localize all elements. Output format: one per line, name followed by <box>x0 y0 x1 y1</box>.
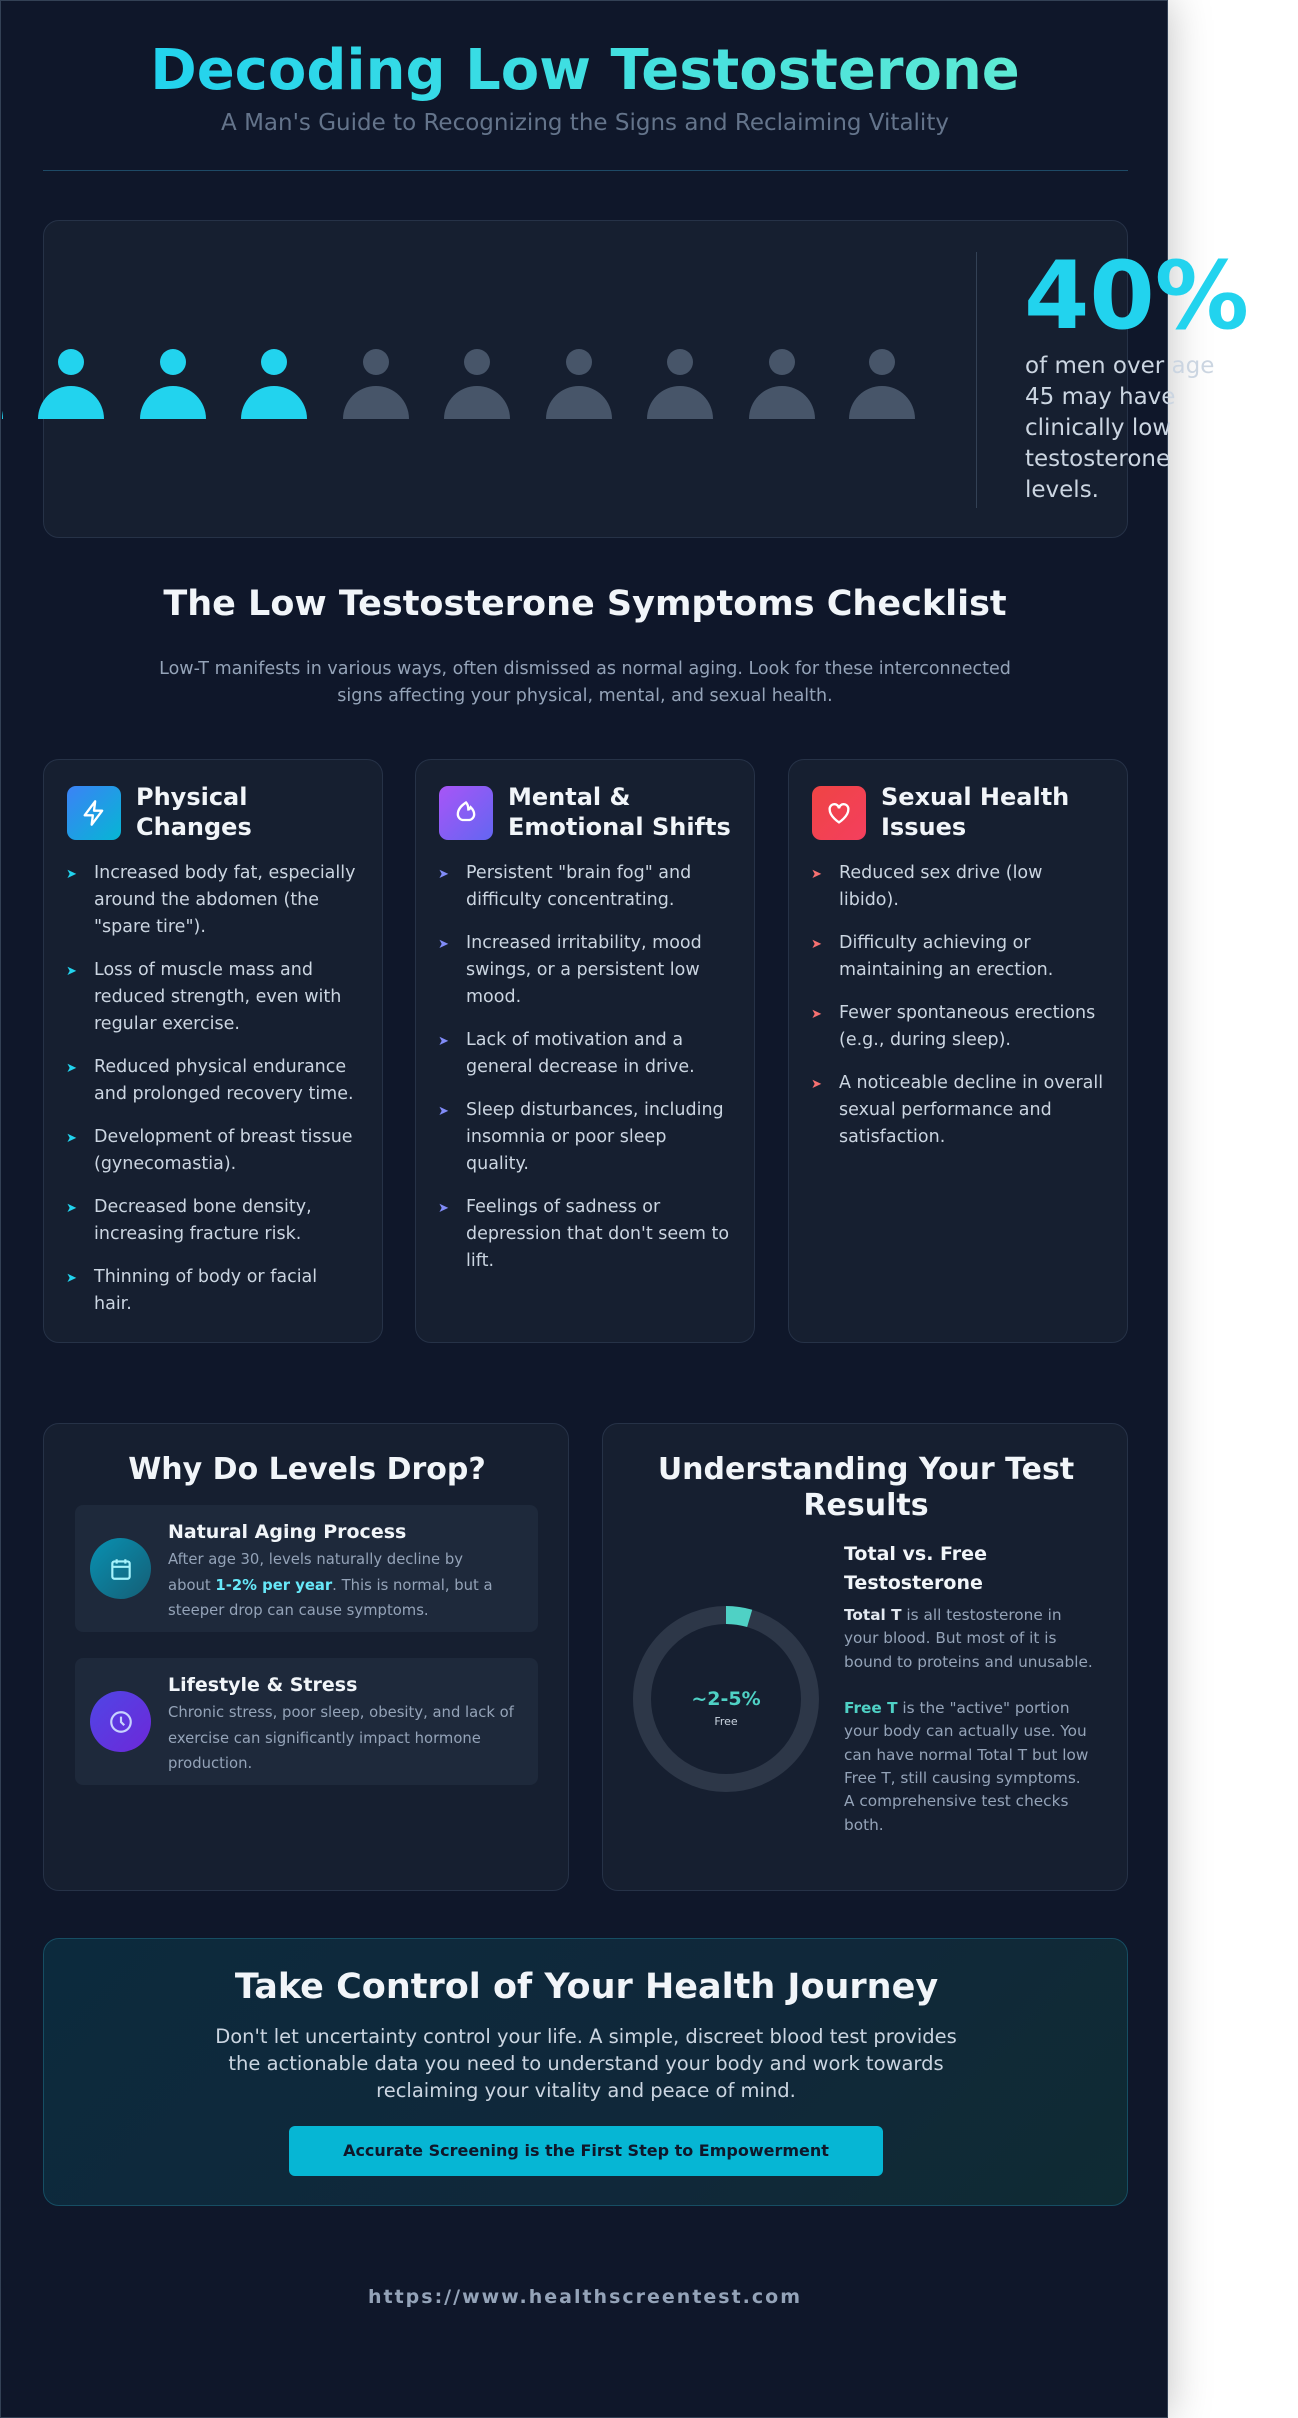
text: total vs free: Total vs. Free Testosterone <box>844 1543 987 1594</box>
panel: physical: Decreased bone density, increasing fracture risk. <box>94 1197 312 1244</box>
panel: physical: Loss of muscle mass and reduced strength, even with regular exercise. <box>94 960 341 1034</box>
panel: call to action <box>43 1938 1128 2206</box>
button <box>289 2126 883 2176</box>
panel: physical: Reduced physical endurance and prolonged recovery time. <box>94 1057 354 1104</box>
sub-card: lifestyle: Chronic stress, poor sleep, obesity, and lack of exercise can significantly impact hormone production. <box>168 1704 514 1772</box>
panel: physical: Changes <box>136 813 252 841</box>
panel: physical <box>43 759 383 1343</box>
donut chart <box>633 1606 819 1792</box>
intro text: Low-T manifests in various ways, often dismissed as normal aging. Look for these interconnected signs affecting your physical, mental, and sexual health. <box>159 659 1011 706</box>
donut chart: Free <box>714 1715 738 1728</box>
title: Decoding Low Testosterone <box>150 38 1020 103</box>
panel: sexual: A noticeable decline in overall sexual performance and satisfaction. <box>839 1073 1103 1147</box>
text: total vs free: Total T is all testosterone in your blood. But most of it is bound to proteins and unusable. <box>844 1606 1093 1671</box>
subtitle: A Man's Guide to Recognizing the Signs and Reclaiming Vitality <box>221 110 949 136</box>
heading: take control: Take Control of Your Health Journey <box>235 1967 938 2007</box>
sub-card: lifestyle <box>75 1658 538 1785</box>
icon: brain <box>439 786 493 840</box>
panel: mental: Persistent "brain fog" and difficulty concentrating. <box>466 863 691 910</box>
people icons <box>2 349 915 419</box>
panel: mental: Emotional Shifts <box>508 813 731 841</box>
panel: sexual: Fewer spontaneous erections (e.g., during sleep). <box>839 1003 1095 1050</box>
stat description: of men over age 45 may have clinically low testosterone levels. <box>1025 353 1214 503</box>
panel: mental: Sleep disturbances, including insomnia or poor sleep quality. <box>466 1100 724 1174</box>
icon: calendar <box>90 1538 151 1599</box>
panel: sexual: Sexual Health <box>881 783 1069 811</box>
panel: why levels drop <box>43 1423 569 1891</box>
panel: sexual <box>788 759 1128 1343</box>
panel: mental <box>415 759 755 1343</box>
sub-card: aging: Natural Aging Process <box>168 1521 406 1543</box>
heading: why: Why Do Levels Drop? <box>128 1452 486 1487</box>
sub-card: aging <box>75 1505 538 1632</box>
button: Accurate Screening is the First Step to Empowerment <box>343 2141 829 2160</box>
heading: checklist: The Low Testosterone Symptoms Checklist <box>163 584 1007 624</box>
icon: clock <box>90 1691 151 1752</box>
panel: mental: Mental & <box>508 783 630 811</box>
cta text: Don't let uncertainty control your life. A simple, discreet blood test provides the actionable data you need to understand your body and work towards reclaiming your vitality and peace of mind. <box>215 2025 957 2102</box>
sub-card: lifestyle: Lifestyle & Stress <box>168 1674 357 1696</box>
panel: mental: Increased irritability, mood swings, or a persistent low mood. <box>466 933 702 1007</box>
panel: statistic <box>43 220 1128 538</box>
footer url: https://www.healthscreentest.com <box>368 2286 802 2308</box>
panel: sexual: Difficulty achieving or maintaining an erection. <box>839 933 1053 980</box>
donut chart: ~2-5% <box>691 1688 761 1710</box>
text: total vs free <box>844 1543 1093 1834</box>
big stat: 40% <box>1024 242 1249 351</box>
panel: physical: Development of breast tissue (gynecomastia). <box>94 1127 353 1174</box>
sub-card: aging: After age 30, levels naturally decline by about 1-2% per year. This is normal, but a steeper drop can cause symptoms. <box>168 1551 493 1619</box>
heading: test results: Understanding Your Test Results <box>658 1452 1074 1523</box>
icon: lightning <box>67 786 121 840</box>
panel: mental: Feelings of sadness or depression that don't seem to lift. <box>466 1197 729 1271</box>
panel: sexual: Reduced sex drive (low libido). <box>839 863 1042 910</box>
panel: physical: Physical <box>136 783 247 811</box>
panel: sexual: Issues <box>881 813 966 841</box>
panel: physical: Increased body fat, especially around the abdomen (the "spare tire"). <box>94 863 356 937</box>
text: total vs free: Free T is the "active" portion your body can actually use. You can have normal Total T but low Free T, still causing symptoms. A comprehensive test checks both. <box>844 1699 1088 1834</box>
panel: mental: Lack of motivation and a general decrease in drive. <box>466 1030 695 1077</box>
panel: physical: Thinning of body or facial hair. <box>94 1267 317 1314</box>
icon: heart <box>812 786 866 840</box>
panel: test results <box>602 1423 1128 1891</box>
